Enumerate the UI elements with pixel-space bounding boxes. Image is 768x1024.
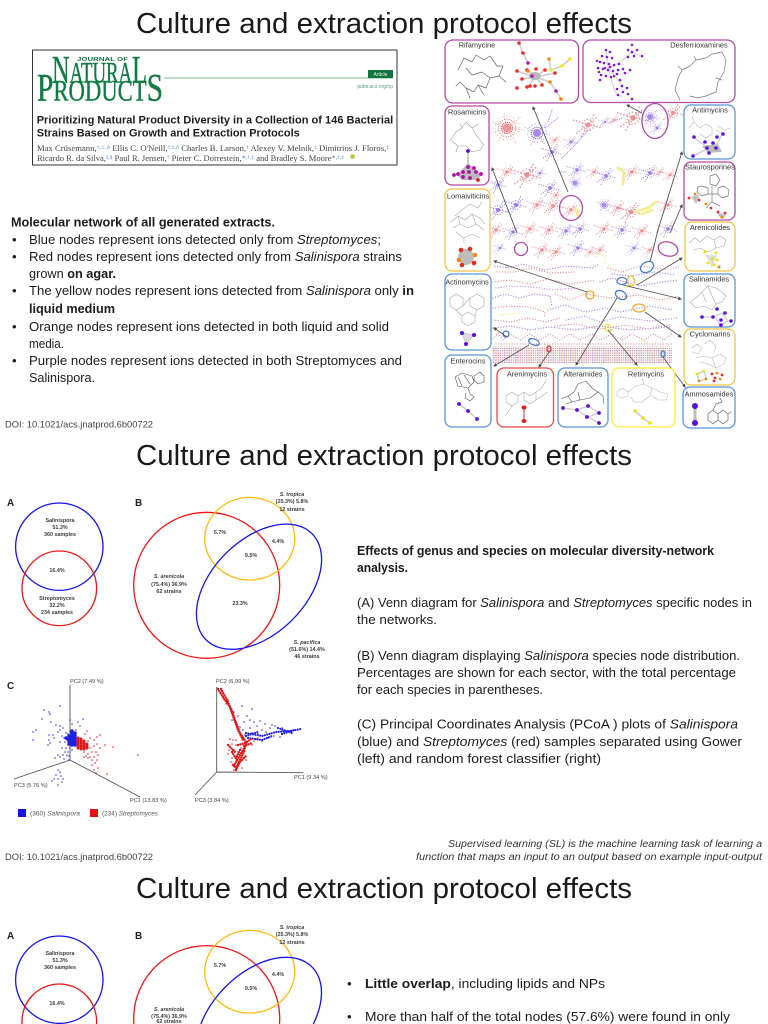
text block: slide 3 bullets: • (347, 976, 352, 991)
venn diagram B: slide 3: 12 strains (279, 940, 305, 946)
journal article header: † (167, 156, 170, 160)
title: slide 3: Culture and extraction protocol effects (136, 873, 632, 905)
panel: Rifamycine: Rifamycine (459, 40, 495, 50)
venn diagram B: slide 3: (75.4%) 36.9% (151, 1014, 187, 1020)
text block: molecular network legend: • (12, 249, 17, 264)
journal article header: ‡,§ (106, 156, 113, 160)
venn diagram B: (75.4%) 36.9% (151, 582, 187, 588)
text block: molecular network legend: • (12, 353, 17, 368)
PCoA plot right: PC2 (6.99 %) (216, 679, 250, 685)
journal article header: ‡ (386, 146, 390, 150)
journal article header: Article (374, 72, 388, 78)
panel: Antimycins (684, 105, 735, 159)
venn diagram A: slide 3: A (7, 931, 14, 942)
text block: molecular network legend: Orange nodes represent ions detected in both liquid and solid (29, 319, 389, 334)
venn diagram B: S. tropica (280, 492, 304, 498)
text block: venn and PCoA explanation: (B) Venn diagram displaying Salinispora species node distribution. (357, 648, 740, 663)
panel: Desferrioxamines: Desferrioxamines (670, 40, 728, 50)
network chains (493, 252, 680, 344)
journal article header: ∗,†,‡ (242, 154, 255, 160)
DOI note: slide 1: DOI: 10.1021/acs.jnatprod.6b00722 (5, 420, 153, 430)
text block: slide 3 bullets: More than half of the total nodes (57.6%) were found in only (365, 1009, 730, 1024)
panel: Salinamides (684, 274, 735, 327)
text block: venn and PCoA explanation: (left) and random forest classifier (right) (357, 751, 601, 766)
venn diagram A: Streptomyces (39, 596, 75, 602)
journal article header: † (246, 146, 249, 150)
panel: Rosamicins (445, 106, 489, 185)
venn diagram A: 32.2% (49, 603, 65, 609)
journal article header (32, 48, 397, 165)
venn diagram B: slide 3: (25.3%) 5.8% (276, 932, 309, 938)
venn diagram B: slide 3: B (135, 931, 142, 942)
journal article header: Strains Based on Growth and Extraction Protocols (37, 128, 300, 140)
journal article header: Max Crüsemann, (37, 144, 92, 153)
panel: Antimycins: Antimycins (692, 106, 728, 114)
text block: molecular network legend: • (12, 319, 17, 334)
venn diagram B: slide 3: 4.4% (272, 972, 284, 978)
journal article header: Alexey V. Melnik, (249, 144, 314, 153)
panel: Cyclomarins: Cyclomarins (690, 330, 731, 338)
text block: venn and PCoA explanation: for each species in parentheses. (357, 682, 543, 697)
text block: venn and PCoA explanation: (A) Venn diagram for Salinispora and Streptomyces specific nodes in (357, 595, 752, 610)
PCoA plot left: PC3 (5.76 %) (14, 783, 48, 789)
network clusters (486, 104, 685, 260)
panel: Lomaiviticins: Lomaiviticins (447, 192, 489, 200)
singleton node grid (492, 346, 672, 364)
text block: molecular network legend: Purple nodes represent ions detected in both Streptomyces and (29, 353, 402, 368)
venn diagram A (7, 498, 103, 626)
panel: Lomaiviticins (445, 189, 490, 271)
text block: venn and PCoA explanation: Percentages are shown for each sector, with the total percentage (357, 665, 736, 680)
venn diagram A: 234 samples (41, 610, 73, 616)
legend: PCoA: (360) Salinispora (30, 810, 80, 818)
note: supervised learning (416, 839, 763, 863)
PCoA plot left (7, 679, 167, 804)
journal article header: NATURAL (52, 48, 147, 92)
panel: Arenicolides (685, 222, 735, 271)
venn diagram B: S. arenicola (154, 574, 184, 580)
panel: Retimycins: Retimycins (628, 370, 664, 378)
molecular network chart (486, 104, 685, 387)
venn diagram B: slide 3: 5.7% (214, 963, 226, 969)
venn diagram B: S. pacifica (294, 640, 320, 646)
text block: molecular network legend: grown on agar. (29, 266, 116, 281)
venn diagram A: slide 3: 360 samples (44, 965, 76, 971)
text block: venn and PCoA explanation (357, 543, 752, 766)
panel: Enterocins: Enterocins (451, 356, 486, 366)
venn diagram B: 5.7% (214, 530, 226, 536)
PCoA plot right: PC1 (9.34 %) (294, 775, 328, 781)
journal article header: ‡ (314, 146, 317, 150)
venn diagram A: slide 3: 51.3% (52, 958, 68, 964)
journal article header: pubs.acs.org/np (357, 84, 393, 90)
text block: venn and PCoA explanation: the networks. (357, 612, 437, 627)
venn diagram A: A (7, 498, 14, 509)
text block: venn and PCoA explanation: Effects of genus and species on molecular diversity-network (357, 543, 715, 558)
PCoA plot left: PC1 (13.83 %) (130, 798, 167, 804)
panel: Actinomycins (445, 274, 491, 350)
journal article header: JOURNAL OF (77, 57, 129, 63)
panel: Actinomycins: Actinomycins (445, 278, 489, 286)
journal article header: †,⊥,∆ (97, 144, 110, 150)
panel: Staurosporines: Staurosporines (685, 162, 735, 172)
legend: PCoA (18, 809, 159, 818)
title: slide 2: Culture and extraction protocol effects (136, 440, 632, 472)
venn diagram B: slide 3: 9.5% (245, 986, 257, 992)
PCoA plot right (195, 679, 328, 804)
venn diagram B: B (135, 498, 142, 509)
journal article header: Ellis C. O'Neill, (110, 144, 168, 153)
legend: PCoA: (234) Streptomyces (102, 810, 159, 818)
journal article header: Pieter C. Dorrestein, (169, 154, 242, 163)
panel: Arenicolides: Arenicolides (690, 223, 730, 232)
panel: Arenimycins: Arenimycins (507, 370, 547, 378)
panel: Retimycins (612, 368, 675, 427)
text block: molecular network legend: Red nodes represent ions detected only from Salinispora strains (29, 249, 402, 264)
highlighted ellipses (503, 104, 679, 357)
panel: Rifamycine (445, 40, 578, 103)
venn diagram A: slide 3 (7, 931, 103, 1024)
text block: molecular network legend: Molecular network of all generated extracts. (11, 215, 275, 230)
text block: venn and PCoA explanation: analysis. (357, 560, 408, 575)
venn diagram B (134, 492, 345, 673)
journal article header: and Bradley S. Moore (254, 154, 332, 163)
panel: Salinamides: Salinamides (689, 274, 729, 284)
panel: Ammosamides: Ammosamides (685, 390, 734, 398)
journal article header: ∗,†,‡ (332, 154, 345, 160)
text block: slide 3 bullets: • (347, 1009, 352, 1024)
text block: molecular network legend: • (12, 232, 17, 247)
journal article header: Charles B. Larson, (179, 144, 246, 153)
venn diagram A: slide 3: 16.4% (49, 1001, 65, 1007)
journal article header: Dimitrios J. Floros, (317, 144, 386, 153)
journal article header: †,‡,∆ (168, 144, 179, 150)
venn diagram B: 62 strains (156, 589, 182, 595)
venn diagram B: slide 3 (134, 925, 321, 1024)
panel: Desferrioxamines (583, 40, 735, 102)
panel: Alteramides (558, 368, 608, 427)
note: supervised learning: function that maps an input to an output based on example input-output (416, 852, 763, 863)
venn diagram A: slide 3: Salinispora (45, 951, 76, 957)
venn diagram B: slide 3: S. arenicola (154, 1007, 184, 1013)
venn diagram B: 12 strains (279, 507, 305, 513)
panel: Enterocins (445, 355, 491, 427)
text block: molecular network legend: media. (29, 336, 64, 351)
venn diagram B: slide 3: S. tropica (280, 925, 304, 931)
venn diagram B: 4.4% (272, 539, 284, 545)
venn diagram B: (25.3%) 5.8% (276, 499, 309, 505)
arrows (492, 105, 685, 387)
venn diagram A: 51.3% (52, 525, 68, 531)
journal article header: Prioritizing Natural Product Diversity in a Collection of 146 Bacterial (37, 114, 393, 126)
venn diagram B: 9.5% (245, 553, 257, 559)
PCoA plot left: C (7, 681, 14, 692)
text block: venn and PCoA explanation: (blue) and Streptomyces (red) samples separated using Gower (357, 734, 743, 749)
venn diagram A: 16.4% (49, 568, 65, 574)
venn diagram B: 46 strains (294, 654, 320, 660)
venn diagram B: (51.6%) 14.4% (289, 647, 325, 653)
text block: molecular network legend: Salinispora. (29, 370, 95, 385)
text block: venn and PCoA explanation: (C) Principal Coordinates Analysis (PCoA ) plots of Salinispora (357, 716, 738, 732)
panel: Cyclomarins (684, 329, 735, 385)
panel: Alteramides: Alteramides (563, 370, 603, 378)
venn diagram B: 23.3% (232, 601, 248, 607)
journal article header: PRODUCTS (37, 66, 163, 110)
DOI note: slide 2: DOI: 10.1021/acs.jnatprod.6b00722 (5, 852, 153, 862)
PCoA plot right: PC3 (3.84 %) (195, 798, 229, 804)
text block: molecular network legend: Blue nodes represent ions detected only from Streptomyces; (29, 232, 381, 247)
text block: molecular network legend: • (12, 283, 17, 298)
PCoA plot left: PC2 (7.49 %) (70, 679, 104, 685)
panel: Rosamicins: Rosamicins (448, 108, 486, 116)
venn diagram A: 360 samples (44, 532, 76, 538)
text block: slide 3 bullets (347, 976, 730, 1024)
text block: molecular network legend: liquid medium (29, 301, 115, 316)
journal article header: Ricardo R. da Silva, (37, 154, 102, 163)
panel: Arenimycins (497, 368, 554, 427)
panel: Ammosamides (683, 387, 735, 428)
text block: molecular network legend: The yellow nodes represent ions detected from Salinispora only in (29, 283, 414, 298)
text block: molecular network legend (11, 215, 414, 385)
note: supervised learning: Supervised learning (SL) is the machine learning task of learning a (448, 839, 762, 850)
text block: slide 3 bullets: Little overlap , including lipids and NPs (365, 976, 605, 991)
journal article header: Paul R. Jensen, (113, 154, 167, 163)
venn diagram A: Salinispora (45, 518, 76, 524)
panel: Staurosporines (684, 162, 735, 220)
title: slide 1: Culture and extraction protocol effects (136, 8, 632, 40)
